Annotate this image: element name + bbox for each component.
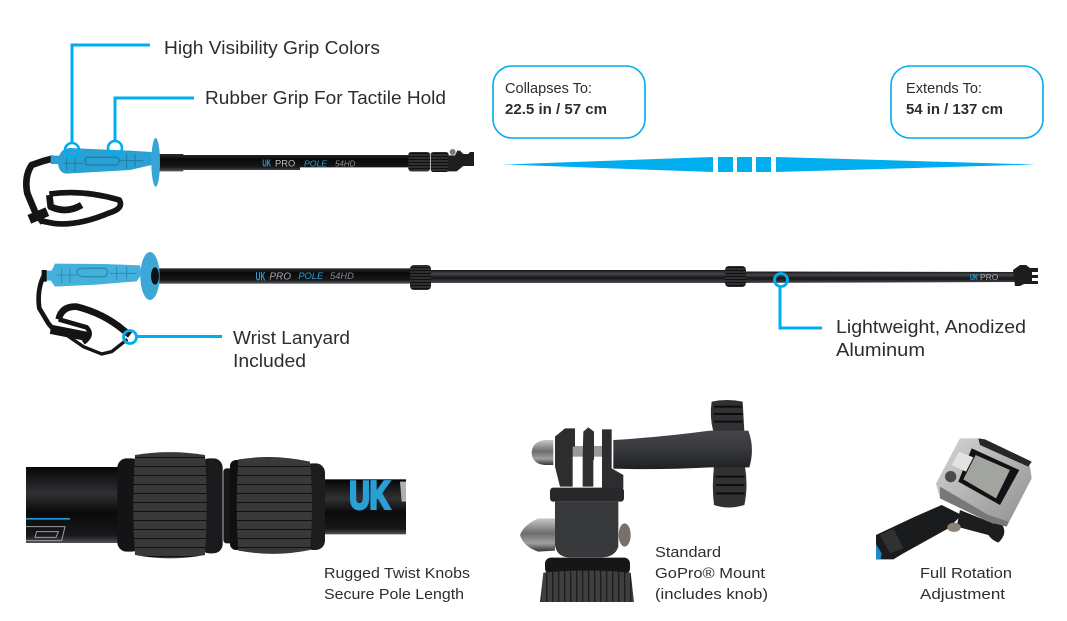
callout: anodized aluminum: Lightweight, Anodized	[836, 317, 1026, 337]
shaft	[157, 154, 410, 171]
twist knob two	[725, 266, 746, 287]
pole label: UK	[262, 159, 271, 170]
side button	[945, 471, 956, 482]
wrist strap	[39, 275, 130, 354]
shaft middle	[430, 270, 726, 283]
left shaft	[26, 467, 123, 543]
panel: extended pole, right sections	[410, 265, 1038, 290]
callout: anodized aluminum	[774, 274, 1026, 360]
pole label: POLE	[298, 271, 324, 281]
printed logo: UK	[349, 474, 390, 518]
twist knobs	[408, 152, 430, 171]
side nut	[520, 518, 555, 552]
knob two	[237, 457, 312, 554]
collars	[117, 458, 141, 552]
pole label: UK	[970, 272, 979, 282]
screen	[952, 452, 973, 472]
photo: twist knobs	[26, 452, 406, 558]
blue line	[26, 518, 70, 520]
callout: rubber grip	[108, 88, 446, 155]
thumb knob arm	[957, 510, 1004, 543]
lens frame	[958, 448, 1019, 505]
hand guard	[151, 138, 160, 187]
callout box: collapses to: Collapses To:	[505, 81, 592, 97]
blue band	[876, 544, 882, 559]
rivet	[619, 523, 631, 547]
collar	[550, 488, 624, 502]
mount	[1013, 265, 1038, 286]
callout: high visibility grip colors	[65, 38, 380, 157]
acorn nut	[532, 440, 553, 465]
pole	[876, 505, 962, 559]
thumb knob lobes	[711, 400, 744, 432]
pole label: 54HD	[335, 159, 356, 168]
knob ridges	[714, 407, 744, 493]
pole label: PRO	[269, 271, 291, 282]
lower collar	[545, 558, 630, 574]
caption: GoPro mount	[655, 544, 768, 603]
knurled grip	[540, 570, 634, 602]
shaft	[153, 268, 412, 284]
length scale arrow	[503, 157, 1036, 172]
callout box: extends to: 54 in / 137 cm	[906, 102, 1003, 118]
lens	[963, 455, 1010, 498]
callout: rubber grip: Rubber Grip For Tactile Hold	[205, 88, 446, 108]
twist knob one	[410, 265, 431, 290]
grip	[42, 264, 142, 287]
pole label: UK	[256, 270, 266, 284]
pole label: PRO	[980, 272, 999, 282]
pole label	[970, 272, 999, 282]
callout box: collapses to	[493, 66, 645, 138]
camera housing	[936, 438, 1032, 527]
mount fingers	[555, 428, 575, 487]
callout: wrist lanyard: Included	[233, 351, 306, 371]
photo: camera on pole	[876, 438, 1032, 559]
callout: wrist lanyard	[124, 328, 350, 371]
panel: extended pole, left section	[39, 252, 412, 354]
caption: GoPro mount: GoPro® Mount	[655, 565, 766, 582]
knob stem	[613, 431, 752, 469]
caption: GoPro mount: (includes knob)	[655, 586, 768, 603]
pole label: PRO	[275, 158, 295, 168]
caption: twist knobs	[324, 565, 470, 603]
pole label: POLE	[304, 158, 327, 168]
right shaft	[322, 479, 406, 534]
latch	[978, 438, 1032, 467]
caption: twist knobs: Rugged Twist Knobs	[324, 565, 470, 582]
caption: camera rotation: Full Rotation	[920, 565, 1012, 582]
hand guard	[140, 252, 160, 300]
panel: collapsed pole	[26, 138, 474, 224]
caption: twist knobs: Secure Pole Length	[324, 586, 464, 603]
lower housing shadow	[940, 487, 1008, 527]
callout box: collapses to: 22.5 in / 57 cm	[505, 102, 607, 118]
callout box: extends to: Extends To:	[906, 81, 982, 97]
printed outline letter	[26, 527, 65, 541]
thread	[572, 446, 605, 457]
photo: GoPro mount	[520, 400, 752, 602]
callout: wrist lanyard: Wrist Lanyard	[233, 328, 350, 348]
caption: GoPro mount: Standard	[655, 544, 721, 561]
callout box: extends to	[891, 66, 1043, 138]
wrist strap	[26, 158, 120, 224]
grip	[51, 148, 152, 174]
caption: camera rotation: Adjustment	[920, 586, 1006, 603]
silver screw	[947, 523, 961, 532]
shaft end	[745, 272, 1016, 283]
body	[555, 502, 618, 557]
mount	[448, 151, 474, 171]
knob highlight	[880, 528, 903, 553]
caption: camera rotation	[920, 565, 1012, 603]
pole label	[256, 270, 354, 284]
callout: high visibility grip colors: High Visibility Grip Colors	[164, 38, 380, 58]
pole label	[262, 158, 356, 170]
callout: anodized aluminum: Aluminum	[836, 340, 925, 360]
knob one	[133, 452, 207, 558]
pole label: 54HD	[330, 271, 354, 281]
